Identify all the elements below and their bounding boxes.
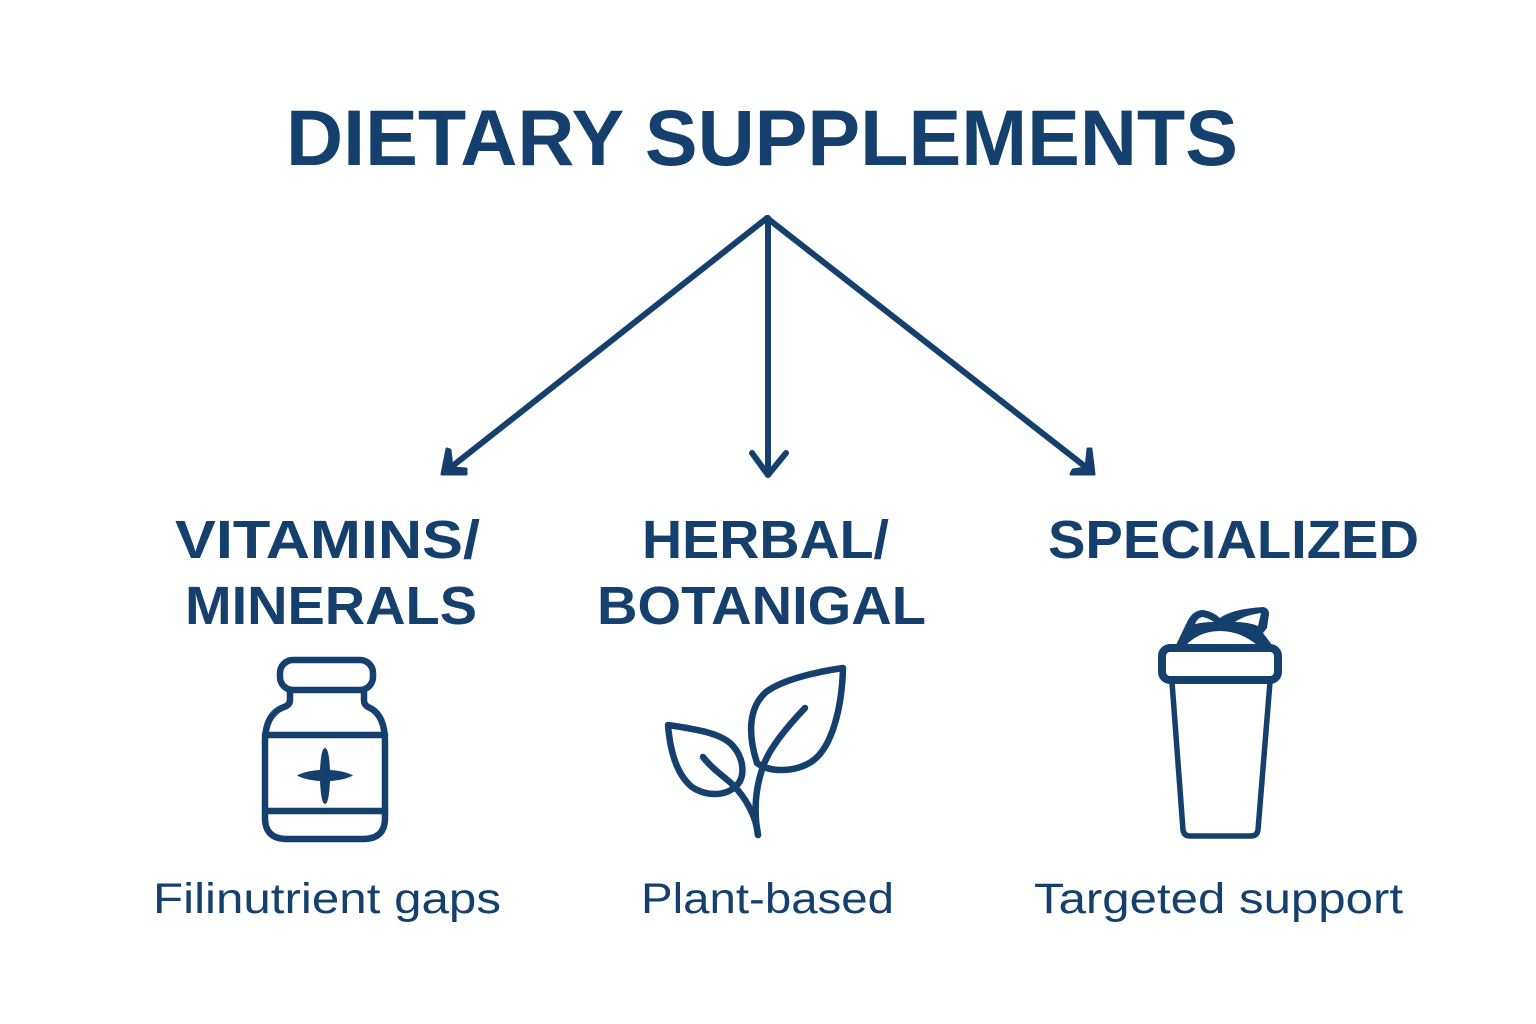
arrow: to herbal/botanical [752, 218, 786, 475]
caption: herbal/botanical: Plant-based [641, 875, 894, 923]
heading: herbal/botanical [597, 510, 926, 636]
heading: vitamins/minerals: MINERALS [185, 576, 477, 636]
heading: herbal/botanical: BOTANIGAL [597, 576, 926, 636]
arrow: to vitamins/minerals [442, 218, 767, 474]
caption: specialized: Targeted support [1034, 875, 1403, 923]
column: vitamins/minerals [153, 510, 501, 923]
icon: supplement bottle [265, 660, 385, 839]
caption: vitamins/minerals: Filinutrient gaps [153, 875, 501, 923]
icon: shaker cup [1162, 607, 1278, 836]
column: herbal/botanical [597, 510, 926, 923]
title: DIETARY SUPPLEMENTS [286, 93, 1238, 182]
column: specialized [1034, 510, 1419, 923]
icon: leaves [668, 668, 843, 835]
heading: vitamins/minerals: VITAMINS/ [175, 510, 480, 570]
icon detail: cross [297, 748, 353, 804]
heading: vitamins/minerals [175, 510, 480, 636]
heading: specialized: SPECIALIZED [1048, 510, 1419, 570]
arrows from title to categories [442, 218, 1094, 475]
arrow: to specialized [767, 218, 1094, 474]
heading: herbal/botanical: HERBAL/ [642, 510, 889, 570]
